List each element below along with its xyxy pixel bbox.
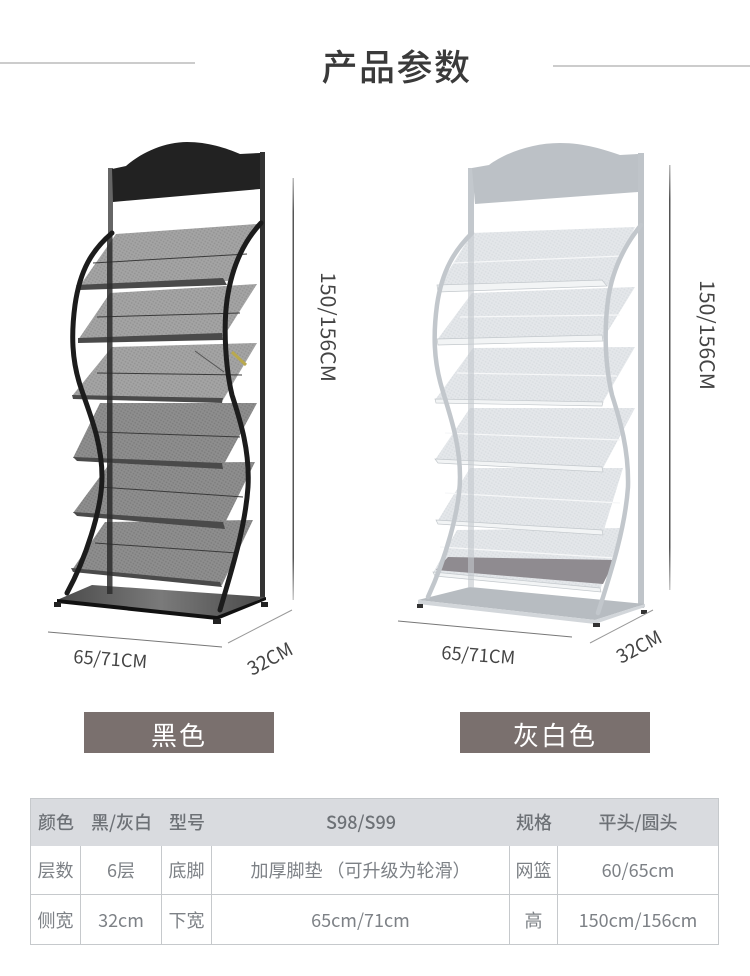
dimension label width black: 65/71CM: [73, 643, 148, 674]
grey rack rear posts: [468, 153, 644, 608]
dimension label width grey: 65/71CM: [441, 639, 516, 670]
table row: widths: 32cm: [98, 907, 144, 933]
black rack curved side arms: [67, 223, 261, 610]
black rack shelves: [71, 224, 257, 587]
black rack centre post through mesh: [107, 234, 112, 594]
black rack base: [57, 585, 265, 618]
table row: widths: 高: [524, 907, 542, 933]
grey rack shelves: [433, 227, 635, 592]
table row: widths: 侧宽: [38, 907, 74, 933]
height dimension line grey: [669, 165, 670, 590]
black rack header panel: [112, 142, 260, 202]
table row: layers: 60/65cm: [602, 857, 674, 883]
table header row: 黑/灰白: [91, 809, 152, 835]
colour label black: 黑色: [151, 716, 207, 753]
grey rack header panel: [472, 143, 638, 204]
table row: layers: 网篮: [516, 857, 552, 883]
title rule left: [0, 62, 195, 64]
table row: widths: 65cm/71cm: [311, 907, 410, 933]
specification table: [30, 798, 719, 945]
table header row: 颜色: [38, 809, 74, 835]
table header row: [31, 799, 718, 846]
grey rack base: [418, 587, 645, 620]
black rack feet: [54, 602, 268, 624]
colour label grey-white: 灰白色: [513, 716, 597, 753]
grey rack dark lower mesh: [436, 557, 615, 584]
dimension label depth grey: 32CM: [611, 623, 666, 669]
table row: widths: 150cm/156cm: [579, 907, 697, 933]
table header row: 规格: [516, 809, 552, 835]
grey rack centre post through mesh: [468, 234, 474, 588]
table row: layers: [31, 846, 718, 895]
table row: layers: 加厚脚垫 （可升级为轮滑）: [250, 857, 471, 883]
dimension label height black: 150/156CM: [315, 272, 344, 382]
black rack rear posts: [108, 152, 265, 600]
table row: widths: [38, 895, 697, 944]
table row: layers: 底脚: [168, 857, 204, 883]
grey rack curved side arms: [428, 225, 641, 613]
table row: layers: 6层: [107, 857, 135, 883]
dimension label height grey: 150/156CM: [694, 280, 723, 390]
title rule right: [553, 66, 750, 67]
table row: layers: 层数: [38, 857, 74, 883]
table header row: 型号: [169, 809, 205, 835]
title: 产品参数: [321, 39, 472, 91]
table header row: 平头/圆头: [598, 809, 678, 835]
table row: widths: 下宽: [168, 907, 204, 933]
grey display rack: [417, 143, 647, 627]
grey rack feet: [417, 604, 647, 627]
width dimension lines: [48, 610, 653, 647]
colour label grey-white: [460, 712, 650, 753]
colour label black: [84, 712, 274, 753]
dimension label depth black: 32CM: [242, 635, 297, 681]
height dimension line black: [292, 178, 294, 600]
black display rack: [54, 142, 268, 624]
small tag on shelf: [195, 351, 224, 372]
table header row: S98/S99: [326, 809, 396, 835]
